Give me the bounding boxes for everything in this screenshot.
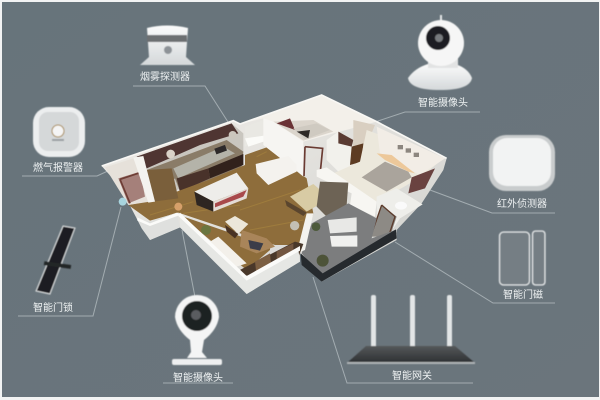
- small bath: [377, 188, 423, 228]
- entry room: [105, 158, 150, 205]
- device: gas alarm: [33, 107, 85, 157]
- label: router: 智能网关: [392, 369, 432, 382]
- label: smart door lock: 智能门锁: [33, 301, 73, 314]
- device: smart door lock: [36, 226, 75, 294]
- floor plan: [102, 95, 447, 294]
- living windows: [237, 242, 303, 277]
- kitchen counter: [147, 140, 243, 197]
- terrace: [302, 203, 397, 278]
- outer walls: [102, 95, 447, 294]
- wood floor: [128, 147, 313, 245]
- partition wall: [263, 118, 303, 177]
- device: mini camera: [172, 295, 222, 365]
- divider wall: [297, 213, 313, 253]
- device: door sensor: [500, 231, 545, 285]
- kitchen back wall: [137, 123, 243, 200]
- bathroom: [327, 132, 353, 172]
- label: door sensor: 智能门磁: [503, 288, 543, 301]
- label: mini camera: 智能摄像头: [173, 371, 223, 384]
- sofa block: [256, 156, 297, 185]
- kitchen island: [194, 173, 248, 202]
- device: pan-tilt camera: [408, 15, 472, 90]
- label: smoke detector: 烟雾探测器: [140, 70, 190, 83]
- label: gas alarm: 燃气报警器: [33, 161, 83, 174]
- front walls: [180, 214, 300, 294]
- device: smoke detector: [140, 26, 195, 65]
- dining table: [290, 184, 330, 212]
- device: router: [347, 295, 475, 364]
- bedroom small: [273, 120, 333, 141]
- living room: [182, 216, 270, 270]
- top wall highlight: [102, 95, 447, 166]
- device: infrared detector: [489, 135, 555, 191]
- sensor markers: [119, 198, 127, 206]
- white sill wall: [317, 167, 377, 217]
- terrace railing: [301, 229, 397, 282]
- closet: [350, 120, 375, 165]
- label: pan-tilt camera: 智能摄像头: [418, 96, 468, 109]
- master bedroom: [333, 130, 443, 202]
- door frames: [304, 147, 323, 176]
- connector lines: [18, 86, 555, 383]
- upper rooms: [240, 95, 377, 142]
- label: infrared detector: 红外侦测器: [497, 197, 547, 210]
